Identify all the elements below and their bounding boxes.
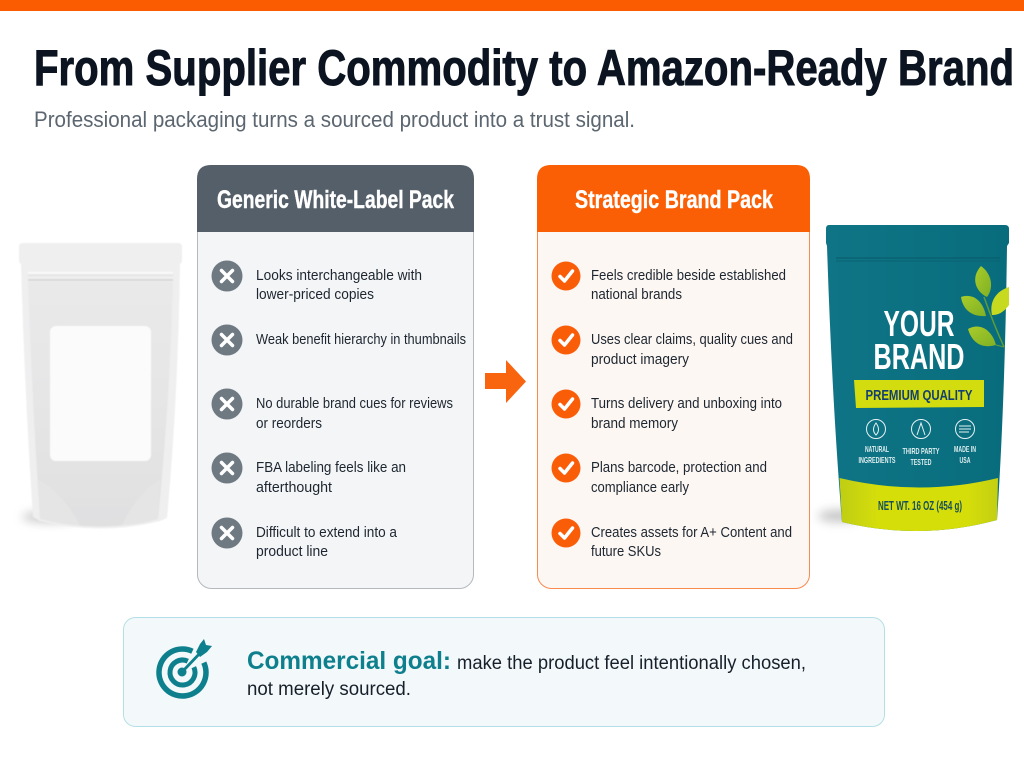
list item 5 bbox=[552, 518, 792, 560]
subtitle: Professional packaging turns a sourced product into a trust signal. bbox=[34, 107, 635, 132]
image: branded teal pouch bbox=[818, 225, 1009, 531]
panel: strategic brand pack bbox=[537, 165, 810, 588]
image: blank white pouch bbox=[19, 243, 182, 528]
panel header: generic bbox=[197, 165, 474, 232]
list item 2 bbox=[212, 324, 466, 356]
list item 2: Weak benefit hierarchy in thumbnails bbox=[256, 332, 466, 348]
premium quality band bbox=[854, 380, 984, 408]
callout: commercial goal: not merely sourced. bbox=[247, 679, 411, 700]
list item 4: Plans barcode, protection and bbox=[591, 460, 767, 476]
panel header: strategic bbox=[537, 165, 810, 232]
badge labels: NATURAL bbox=[865, 444, 889, 454]
list item 3: or reorders bbox=[256, 416, 322, 432]
image: branded teal pouch: PREMIUM QUALITY bbox=[866, 388, 973, 404]
list item 4: FBA labeling feels like an bbox=[256, 460, 406, 476]
list item 1 bbox=[552, 262, 786, 303]
list item 3: Turns delivery and unboxing into bbox=[591, 396, 782, 412]
badges bbox=[866, 420, 974, 438]
heading: strategic brand pack: Strategic Brand Pack bbox=[575, 186, 773, 214]
list item 2: product imagery bbox=[591, 352, 690, 368]
list item 1: Feels credible beside established bbox=[591, 268, 786, 284]
arrow bbox=[485, 360, 526, 403]
list item 1: lower-priced copies bbox=[256, 287, 374, 303]
list item 2: Uses clear claims, quality cues and bbox=[591, 332, 793, 348]
list item 1 bbox=[212, 260, 422, 303]
list item 5: product line bbox=[256, 544, 328, 560]
list item 3 bbox=[552, 390, 782, 432]
list item 3: No durable brand cues for reviews bbox=[256, 396, 453, 412]
list item 5: Creates assets for A+ Content and bbox=[591, 525, 792, 541]
badge labels: INGREDIENTS bbox=[858, 455, 896, 465]
top accent bar bbox=[0, 0, 1024, 11]
leaves bbox=[961, 266, 1009, 347]
list item 5: future SKUs bbox=[591, 544, 661, 560]
list item 4 bbox=[552, 454, 767, 496]
heading: generic white-label pack: Generic White-Label Pack bbox=[217, 186, 454, 214]
lime base bbox=[840, 478, 998, 531]
brand name: YOUR bbox=[884, 303, 954, 344]
callout: commercial goal: make the product feel intentionally chosen, bbox=[457, 653, 806, 674]
badge labels: TESTED bbox=[910, 457, 932, 467]
list item 1: Looks interchangeable with bbox=[256, 268, 422, 284]
badge labels: USA bbox=[960, 455, 970, 465]
image: branded teal pouch: BRAND bbox=[874, 336, 964, 377]
list item 4: afterthought bbox=[256, 480, 332, 496]
list item 3: brand memory bbox=[591, 416, 679, 432]
list item 4 bbox=[212, 452, 406, 496]
badge labels bbox=[858, 444, 976, 467]
list item 5: Difficult to extend into a bbox=[256, 525, 398, 541]
callout: commercial goal bbox=[124, 618, 884, 726]
panel: generic white-label pack bbox=[197, 165, 474, 588]
list item 4: compliance early bbox=[591, 480, 690, 496]
badge labels: THIRD PARTY bbox=[902, 446, 940, 456]
badge labels: MADE IN bbox=[954, 444, 976, 454]
list item 2 bbox=[552, 326, 793, 368]
callout text: Commercial goal: bbox=[247, 647, 451, 675]
list item 3 bbox=[212, 388, 453, 432]
icon: target bbox=[159, 639, 212, 696]
list item 1: national brands bbox=[591, 287, 682, 303]
net weight: NET WT. 16 OZ (454 g) bbox=[878, 499, 962, 513]
list item 5 bbox=[212, 518, 398, 560]
